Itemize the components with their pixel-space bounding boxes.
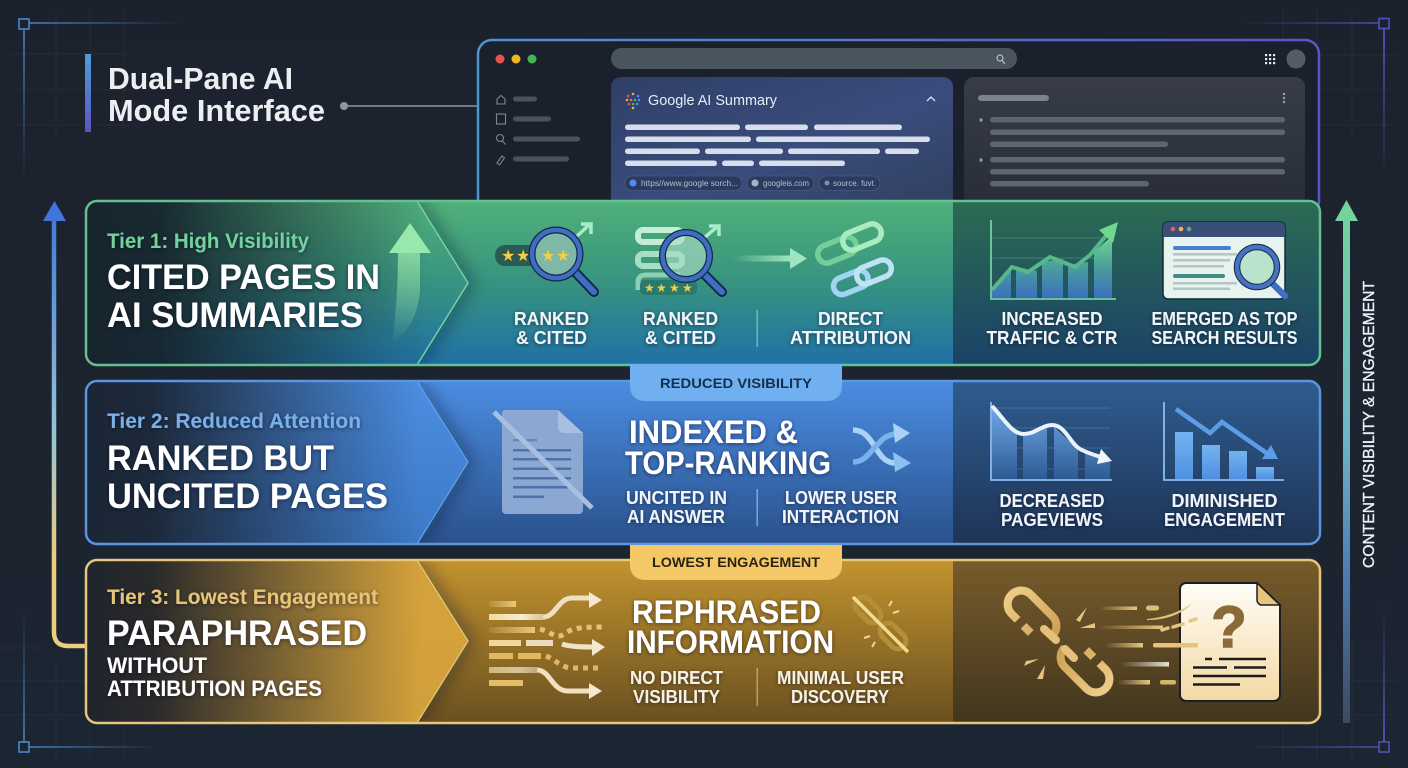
window controls bbox=[496, 54, 536, 64]
icon: unknown document: ? bbox=[1211, 595, 1247, 660]
icon: rising arrow bbox=[389, 223, 431, 345]
tier 3 heading bbox=[107, 586, 378, 701]
search bar bbox=[611, 48, 1017, 69]
icon: results magnifier: ★ bbox=[656, 281, 667, 295]
badge: reduced visibility bbox=[630, 364, 842, 401]
source chips: https//www.google sorch... bbox=[641, 179, 738, 188]
arrow to attribution bbox=[733, 248, 807, 269]
icon: diverging rephrased lines bbox=[489, 592, 605, 699]
panel: tier 1 bbox=[86, 201, 1320, 365]
outcome labels bbox=[986, 308, 1298, 348]
corner frame: bottom right bbox=[1250, 605, 1389, 752]
sidebar bbox=[496, 96, 580, 165]
icon: results magnifier bbox=[638, 226, 722, 295]
icon: rating magnifier: ★ bbox=[556, 248, 570, 265]
chart: diminished engagement bbox=[1164, 402, 1284, 480]
stat labels: RANKED bbox=[514, 308, 589, 329]
axis arrow: right, content visibility and engagement bbox=[1335, 200, 1358, 723]
chart: increased traffic bbox=[991, 220, 1118, 299]
outcome labels: EMERGED AS TOP bbox=[1152, 308, 1298, 329]
tier 1 heading: AI SUMMARIES bbox=[107, 296, 363, 335]
icon: rating magnifier: ★ bbox=[501, 248, 515, 265]
title text bbox=[108, 61, 325, 128]
main statement: INDEXED & bbox=[629, 414, 798, 450]
tier 1 heading bbox=[107, 230, 380, 335]
heading: Dual-Pane AI Mode Interface bbox=[85, 54, 325, 132]
stat labels: ATTRIBUTION bbox=[790, 327, 911, 348]
card title: Google AI Summary bbox=[648, 92, 777, 109]
outcome labels: INCREASED bbox=[1002, 308, 1102, 329]
main statement: TOP-RANKING bbox=[625, 445, 831, 481]
tier 3 heading: ATTRIBUTION PAGES bbox=[107, 676, 322, 701]
sub labels: MINIMAL USER bbox=[777, 667, 904, 688]
outcome labels: DECREASED bbox=[1000, 490, 1104, 511]
main statement: REPHRASED bbox=[632, 594, 821, 630]
tier 3 heading: WITHOUT bbox=[107, 653, 208, 678]
title text: Mode Interface bbox=[108, 93, 325, 128]
tier 2 heading bbox=[107, 410, 388, 516]
icon: results magnifier: ★ bbox=[644, 281, 655, 295]
sparkle icon bbox=[626, 93, 640, 109]
badge: reduced visibility: REDUCED VISIBILITY bbox=[660, 375, 813, 391]
accent bar bbox=[85, 54, 91, 132]
icon: broken chain bbox=[1002, 585, 1115, 698]
tier 3 heading: PARAPHRASED bbox=[107, 614, 367, 653]
outcome labels: SEARCH RESULTS bbox=[1152, 327, 1298, 348]
detail pane bbox=[964, 77, 1305, 207]
icon: shuffle arrows bbox=[853, 423, 911, 472]
Google AI Summary card bbox=[611, 77, 953, 207]
motion streaks bbox=[1098, 603, 1198, 684]
icon: rating magnifier: ★ bbox=[541, 248, 555, 265]
tier 3 heading: Tier 3: Lowest Engagement bbox=[107, 586, 378, 609]
outcome labels: DIMINISHED bbox=[1172, 490, 1278, 511]
sub labels: LOWER USER bbox=[785, 487, 897, 508]
sub labels: UNCITED IN bbox=[626, 487, 727, 508]
main statement bbox=[627, 594, 834, 660]
sub labels: AI ANSWER bbox=[627, 506, 725, 527]
title text: Dual-Pane AI bbox=[108, 61, 293, 96]
source chips bbox=[625, 176, 880, 190]
stat labels: RANKED bbox=[643, 308, 718, 329]
stat labels: & CITED bbox=[645, 327, 716, 348]
outcome labels: TRAFFIC & CTR bbox=[986, 327, 1118, 348]
sub labels: DISCOVERY bbox=[791, 686, 890, 707]
main statement bbox=[625, 414, 831, 481]
chart: decreased pageviews bbox=[991, 402, 1112, 480]
tier 1 heading: Tier 1: High Visibility bbox=[107, 230, 309, 253]
icon: uncited document bbox=[494, 410, 592, 514]
apps and avatar bbox=[1265, 50, 1306, 68]
icon: rating magnifier: ★ bbox=[516, 248, 530, 265]
source chips: source. fuvt. bbox=[833, 179, 876, 188]
sub labels: VISIBILITY bbox=[633, 686, 721, 707]
tier 2 heading: Tier 2: Reduced Attention bbox=[107, 410, 361, 433]
panel: tier 2 bbox=[86, 381, 1320, 544]
connector line bbox=[340, 102, 478, 110]
sub labels bbox=[630, 667, 904, 707]
panel: tier 3 bbox=[86, 560, 1320, 723]
tier 2 heading: UNCITED PAGES bbox=[107, 477, 388, 516]
badge: lowest engagement: LOWEST ENGAGEMENT bbox=[652, 554, 820, 570]
tier 1 heading: CITED PAGES IN bbox=[107, 258, 380, 297]
main statement: INFORMATION bbox=[627, 624, 834, 660]
icon: unknown document bbox=[1180, 583, 1280, 701]
icon: results magnifier: ★ bbox=[669, 281, 680, 295]
icon: struck chain bbox=[852, 594, 909, 652]
source chips: googleis.com bbox=[763, 179, 809, 188]
icon: rating magnifier bbox=[495, 224, 594, 292]
stat labels bbox=[514, 308, 911, 348]
icon: chain links bbox=[815, 221, 894, 297]
icon: results magnifier: ★ bbox=[682, 281, 693, 295]
browser window mockup bbox=[478, 40, 1319, 215]
corner frame: top left bbox=[19, 19, 180, 180]
corner frame: bottom left bbox=[19, 610, 160, 752]
stat labels: & CITED bbox=[516, 327, 587, 348]
summary text lines bbox=[625, 124, 930, 166]
sub labels: NO DIRECT bbox=[630, 667, 724, 688]
stat labels: DIRECT bbox=[818, 308, 884, 329]
sub labels bbox=[626, 487, 899, 527]
outcome labels bbox=[1000, 490, 1286, 530]
icon: search results browser bbox=[1163, 222, 1285, 299]
badge: lowest engagement bbox=[630, 545, 842, 580]
outcome labels: PAGEVIEWS bbox=[1001, 509, 1103, 530]
axis label: CONTENT VISIBILITY & ENGAGEMENT bbox=[1361, 281, 1378, 568]
outcome labels: ENGAGEMENT bbox=[1164, 509, 1286, 530]
corner frame: top right bbox=[1240, 18, 1389, 180]
sub labels: INTERACTION bbox=[782, 506, 899, 527]
axis arrow: left, rising through tiers bbox=[43, 201, 86, 646]
tier 2 heading: RANKED BUT bbox=[107, 439, 334, 478]
